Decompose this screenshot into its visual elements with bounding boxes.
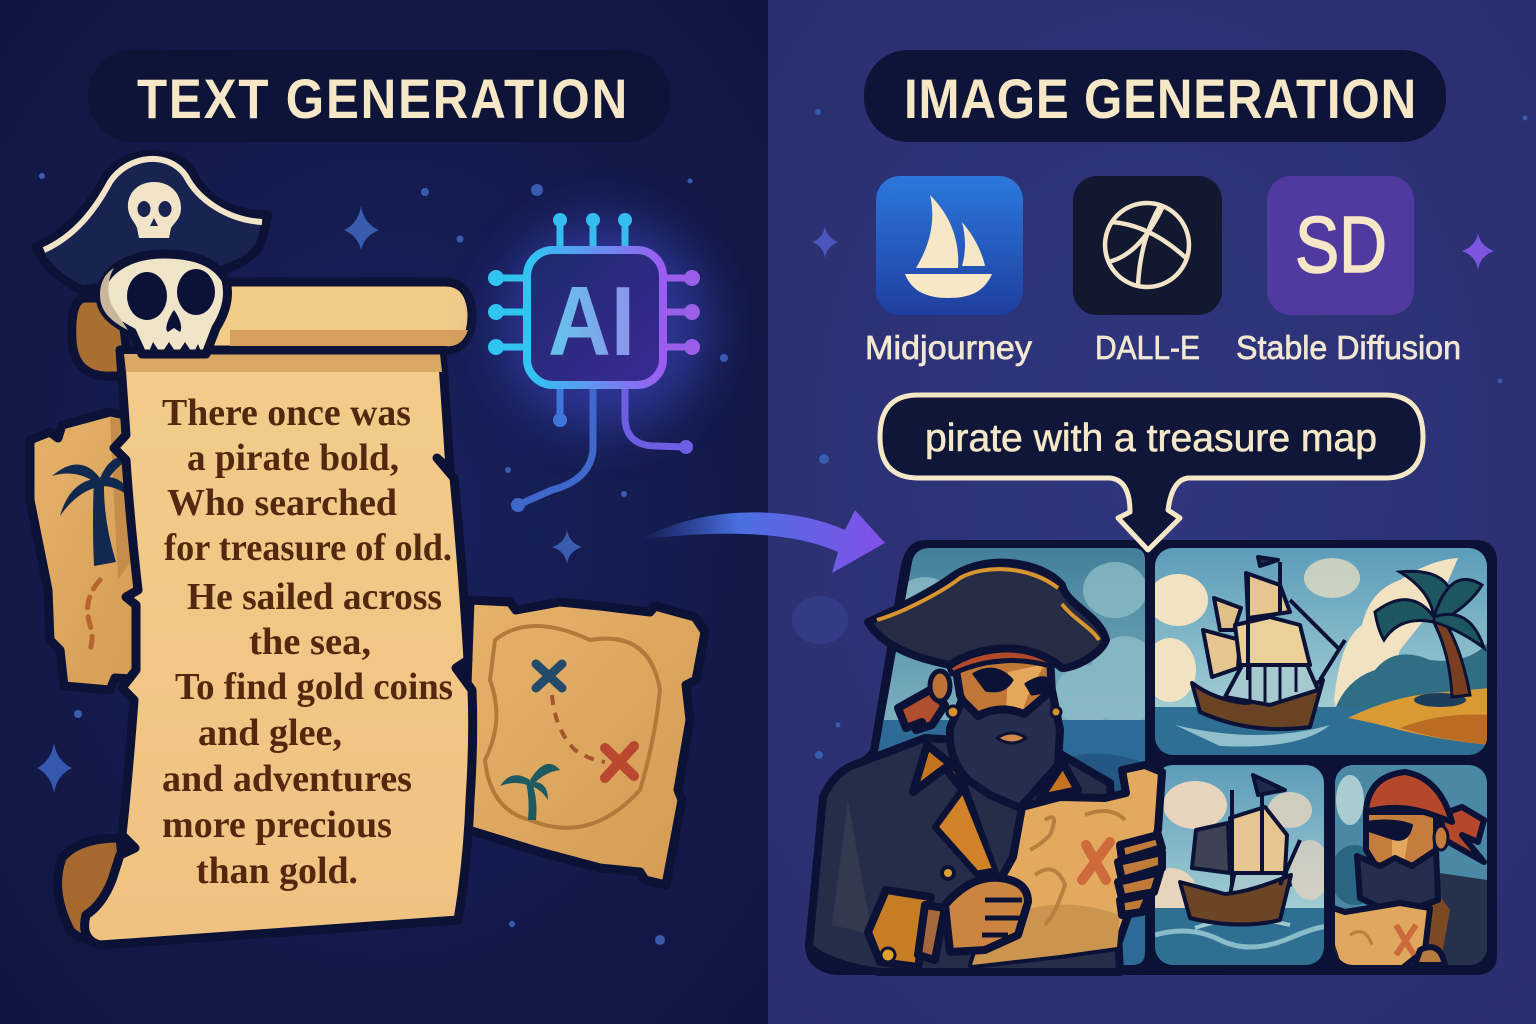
poem text: and glee, <box>198 712 342 754</box>
icon: pirate hat with skull <box>36 154 268 290</box>
scroll shadow under roll <box>124 354 442 372</box>
poem text: He sailed across <box>187 576 442 618</box>
icon: Stable Diffusion: SD <box>1295 200 1387 289</box>
poem text: and adventures <box>162 758 412 800</box>
scroll bottom curl <box>58 838 130 940</box>
icon: large skull on scroll <box>100 254 228 354</box>
small skull emblem <box>128 182 181 238</box>
image panel: second pirate <box>1335 765 1487 965</box>
icon: x mark red <box>605 746 634 778</box>
clouds <box>1155 781 1324 908</box>
bandana knot <box>898 690 945 730</box>
chip glow <box>500 220 710 430</box>
label: DALL-E: DALL-E <box>1095 329 1200 366</box>
beard <box>1357 850 1438 915</box>
pirate left hand and cuff <box>868 890 931 967</box>
eye patch <box>974 669 1012 691</box>
heading pill: text generation: TEXT GENERATION <box>137 68 627 131</box>
decorative stars and dots <box>37 109 1528 945</box>
sea <box>1155 707 1487 755</box>
poem text <box>162 392 453 892</box>
far hills <box>1336 644 1487 707</box>
knot <box>1440 807 1484 862</box>
scroll left roll end <box>72 298 130 376</box>
image panel: ship and island <box>1144 548 1490 760</box>
image grid frame <box>805 540 1497 975</box>
clouds and sunlit sky <box>1155 558 1458 707</box>
map held by pirate <box>972 765 1162 965</box>
image panel: large pirate background <box>878 548 1145 965</box>
poem text: for treasure of old. <box>164 527 452 569</box>
arrow from text to image generation <box>640 510 885 573</box>
poem text: Who searched <box>167 482 397 524</box>
bandana <box>948 649 1052 674</box>
pirate collar lining <box>913 745 995 873</box>
icon: AI chip with circuit lines <box>488 213 710 512</box>
icon: small palm on map <box>500 764 560 820</box>
dashed trail on left map <box>88 580 100 655</box>
pirate coat <box>809 738 1120 972</box>
small map <box>1335 900 1433 965</box>
label: Midjourney: Midjourney <box>865 329 1033 366</box>
prompt speech bubble <box>880 395 1423 550</box>
bandana <box>1366 772 1452 822</box>
prompt text: pirate with a treasure map <box>925 417 1377 460</box>
tricorn hat <box>868 563 1106 668</box>
panel: left background <box>0 0 768 1024</box>
face <box>1366 812 1436 872</box>
heading pill: text generation <box>88 50 670 142</box>
ship <box>1192 557 1345 729</box>
sea <box>878 720 1145 965</box>
poem text: than gold. <box>196 850 358 892</box>
ear <box>1434 826 1448 850</box>
icon: Stable Diffusion <box>1267 176 1414 315</box>
sandy island <box>1348 688 1490 745</box>
palm tree <box>1375 571 1484 697</box>
pirate figure <box>809 563 1162 972</box>
left treasure map behind scroll <box>30 412 150 690</box>
panel: right background <box>768 0 1536 1024</box>
pirate right hand <box>1118 835 1162 915</box>
ship <box>1180 775 1300 925</box>
scroll top roll <box>205 282 472 350</box>
label: Stable Diffusion: Stable Diffusion <box>1236 329 1461 366</box>
poem text: There once was <box>162 392 411 434</box>
heading pill: image generation: IMAGE GENERATION <box>904 68 1416 131</box>
icon: x mark blue <box>536 664 562 688</box>
parchment scroll with poem <box>58 282 473 945</box>
icon: Midjourney <box>876 176 1023 315</box>
clouds <box>905 562 1145 720</box>
poem text: more precious <box>162 804 392 846</box>
pirate face <box>955 655 1052 728</box>
chip label: AI <box>548 266 635 376</box>
poem text: To find gold coins <box>175 666 453 708</box>
map x mark <box>1082 842 1110 880</box>
poem text: a pirate bold, <box>187 437 399 479</box>
eye patch <box>1366 821 1412 840</box>
ear <box>930 671 950 701</box>
poem text: the sea, <box>249 621 371 663</box>
heading pill: image generation <box>864 50 1446 142</box>
scroll sheet <box>85 350 473 945</box>
right treasure map behind scroll <box>462 600 705 885</box>
pirate beard <box>950 690 1060 808</box>
icon: DALL-E <box>1073 176 1222 315</box>
sea <box>1155 908 1325 968</box>
coat <box>1440 873 1487 965</box>
icon: palm tree on left map <box>52 456 134 566</box>
image panel: ship at sea <box>1155 765 1324 965</box>
